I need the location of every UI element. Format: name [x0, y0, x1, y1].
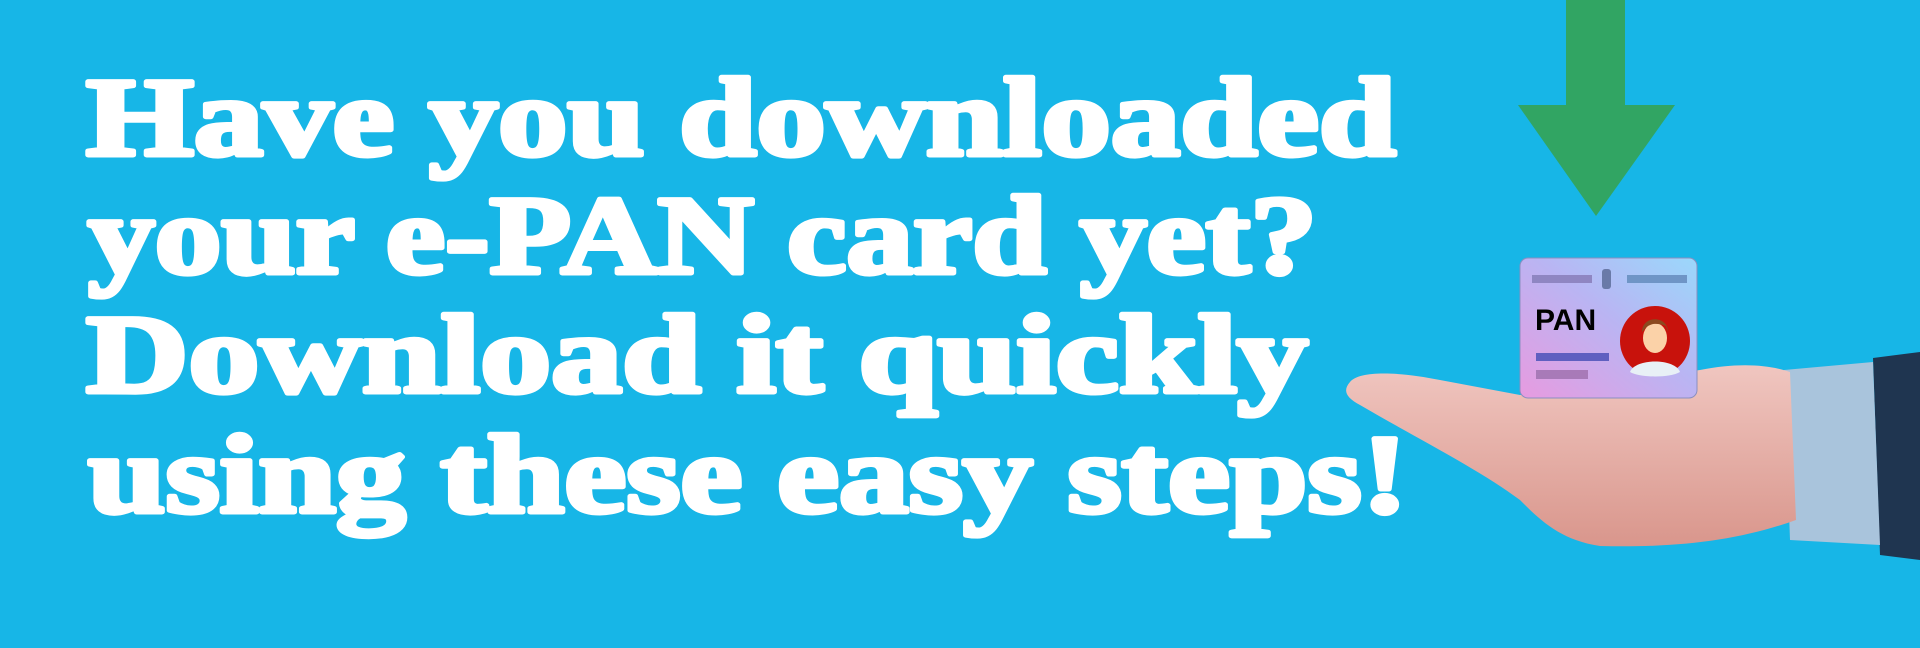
icon: PAN card: PAN	[1535, 304, 1596, 337]
title: Download it quickly	[86, 293, 1308, 417]
icon: PAN card	[1520, 258, 1697, 398]
title: using these easy steps!	[88, 413, 1408, 537]
arrow: download	[1518, 0, 1675, 216]
icon: hand with sleeve	[1346, 352, 1920, 560]
title: Have you downloaded	[86, 56, 1396, 180]
title	[86, 56, 1408, 537]
title: your e-PAN card yet?	[88, 174, 1317, 298]
